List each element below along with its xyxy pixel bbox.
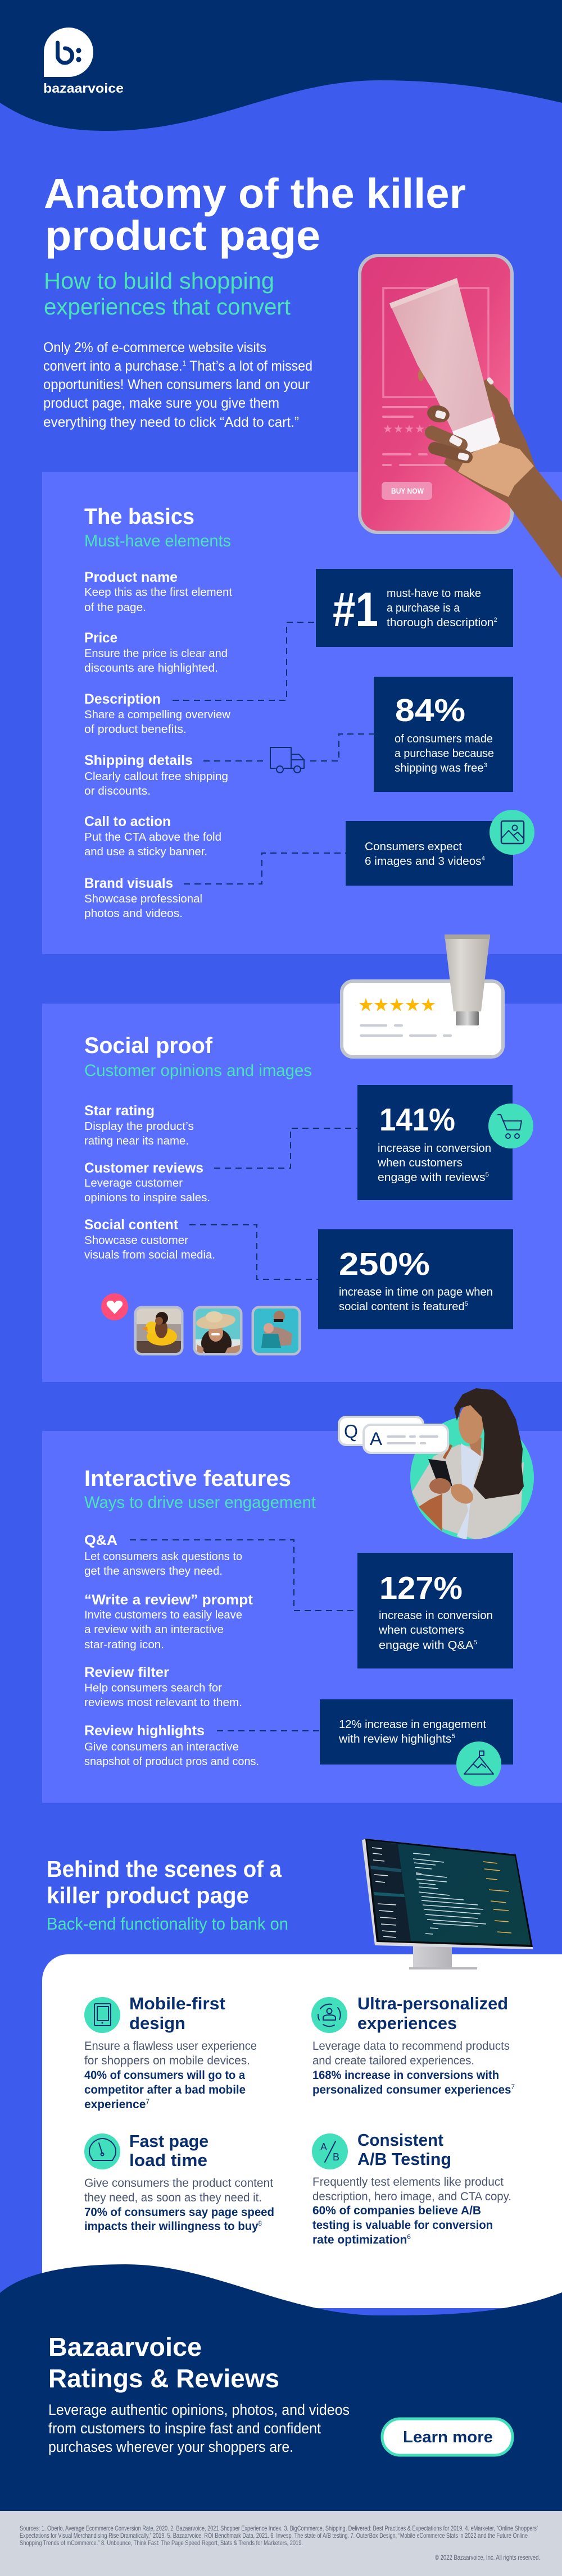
- feature: ultra-personalized experiences: and create tailored experiences.: [312, 2054, 474, 2067]
- header wave with logo: [0, 0, 562, 131]
- item: call to action: [84, 814, 221, 858]
- call to action text: from customers to inspire fast and confident: [48, 2420, 321, 2437]
- stat box: 127 percent: 127%: [379, 1570, 463, 1606]
- stat box: 84 percent: shipping was free: [395, 762, 482, 774]
- five gold stars: [359, 998, 435, 1011]
- illustration: phone with product page: [360, 256, 562, 578]
- intro text: Only 2% of e-commerce website visits: [43, 340, 266, 355]
- feature: mobile-first design: Ensure a flawless user experience: [84, 2040, 257, 2053]
- feature: mobile-first design: competitor after a bad mobile: [84, 2083, 246, 2096]
- feature: consistent A/B testing: description, hero image, and CTA copy.: [312, 2190, 511, 2203]
- connector: brand visuals to stat: [184, 853, 346, 884]
- stat box: 250 percent: 5: [465, 1301, 468, 1307]
- monitor frame: [362, 1839, 533, 1949]
- feature: mobile-first design: 40% of consumers will go to a: [84, 2069, 245, 2082]
- illustration: review card with tube: [342, 934, 503, 1057]
- title: product page: [45, 212, 320, 259]
- item: q and a: get the answers they need.: [84, 1565, 223, 1577]
- feature: consistent A/B testing: A/B Testing: [357, 2149, 451, 2169]
- item: social content: visuals from social media.: [84, 1249, 215, 1261]
- subheading: customer opinions: Customer opinions and images: [84, 1061, 312, 1080]
- stat box: 250 percent: increase in time on page when: [339, 1286, 493, 1298]
- item: write a review prompt: [84, 1592, 253, 1651]
- item: call to action: and use a sticky banner.: [84, 846, 207, 858]
- icon: A/B: [312, 2133, 348, 2169]
- stat box: 141 percent: when customers: [377, 1157, 463, 1169]
- intro text: 1: [183, 359, 186, 367]
- stat box: 141 percent: [357, 1085, 513, 1200]
- title: Anatomy of the killer: [44, 170, 466, 217]
- item: customer reviews: [84, 1160, 210, 1204]
- stat box: 250 percent: [318, 1229, 513, 1329]
- feature: ultra-personalized experiences: personalized consumer experiences: [312, 2083, 516, 2096]
- illustration: desktop monitor with code: [362, 1839, 533, 1969]
- feature: fast page load time: they need, as soon as they need it.: [84, 2191, 262, 2204]
- call to action text: [48, 2401, 350, 2455]
- item: star rating: Star rating: [84, 1103, 155, 1119]
- stat box: 127 percent: [357, 1553, 513, 1668]
- footer wave: call to action: [0, 2264, 562, 2511]
- item: description: Share a compelling overview: [84, 709, 231, 721]
- intro text: [43, 340, 312, 430]
- item: price: Price: [84, 630, 117, 646]
- feature: ultra-personalized experiences: Leverage data to recommend products: [312, 2040, 510, 2053]
- stat box: number one must-have: 2: [494, 617, 497, 623]
- subheading: ways to drive engagement: Ways to drive user engagement: [84, 1493, 316, 1512]
- icon: speedometer: [84, 2133, 120, 2169]
- stat box: 141 percent: engage with reviews: [378, 1171, 479, 1184]
- section heading: behind the scenes: killer product page: [47, 1882, 249, 1908]
- white tube: [445, 934, 490, 1025]
- feature: fast page load time: 70% of consumers say page speed: [84, 2206, 274, 2219]
- icon: person with cycle arrows: [311, 1997, 347, 2033]
- connector: shipping to truck: [203, 760, 265, 762]
- subheading: must-have elements: Must-have elements: [84, 532, 231, 550]
- stat box: images and videos: Consumers expect: [365, 841, 462, 853]
- stat box: 141 percent: 141%: [379, 1102, 455, 1138]
- item: q and a: [84, 1533, 242, 1577]
- connector: q and a to stat: [130, 1540, 357, 1611]
- feature: mobile-first design: experience: [84, 2098, 146, 2111]
- connector: social content to stat: [189, 1225, 318, 1279]
- feature: mobile-first design: design: [129, 2013, 185, 2033]
- heading: social proof: Social proof: [84, 1033, 213, 1058]
- item: description: Description: [84, 691, 161, 707]
- stat box: images and videos: [346, 821, 513, 886]
- item: brand visuals: [84, 876, 202, 920]
- button: learn more: [382, 2419, 513, 2455]
- panel: the basics: [42, 472, 562, 954]
- icon: tablet: [84, 1997, 120, 2033]
- feature: ultra-personalized experiences: 7: [511, 2083, 515, 2091]
- item: description: [84, 691, 231, 736]
- stat box: 250 percent: 250%: [339, 1246, 430, 1282]
- item: review filter: [84, 1665, 242, 1709]
- bubble: answer: A: [370, 1429, 383, 1449]
- item: brand visuals: photos and videos.: [84, 908, 183, 920]
- photo: woman in sun hat: [194, 1307, 241, 1358]
- heading: bazaarvoice ratings and reviews: Ratings & Reviews: [48, 2364, 279, 2393]
- icon: truck: [270, 747, 304, 773]
- feature: mobile-first design: 7: [146, 2098, 149, 2105]
- hand: fingers: [425, 377, 495, 461]
- section heading: behind the scenes: [47, 1856, 288, 1934]
- item: review highlights: Review highlights: [84, 1723, 205, 1739]
- feature: fast page load time: 8: [259, 2219, 262, 2227]
- item: social content: Social content: [84, 1217, 179, 1233]
- stat box: 12 percent: with review highlights: [339, 1733, 445, 1745]
- phone rating stars: [383, 425, 434, 432]
- intro text: product page, make sure you give them: [43, 395, 279, 411]
- item: social content: Showcase customer: [84, 1234, 188, 1247]
- icon: heart: [101, 1293, 128, 1320]
- connector: reviews to stat: [214, 1128, 357, 1168]
- feature: consistent A/B testing: Frequently test elements like product: [312, 2176, 504, 2189]
- connector: description to stat: [173, 622, 316, 700]
- item: shipping details: or discounts.: [84, 785, 151, 797]
- item: product name: Product name: [84, 569, 178, 585]
- section heading: behind the scenes: Back-end functionality to bank on: [47, 1914, 288, 1934]
- monitor screen: [367, 1840, 531, 1945]
- title: [44, 170, 466, 259]
- icon: cart: [488, 1104, 533, 1148]
- footer: sources: [0, 2511, 562, 2576]
- photo: family in pool: [253, 1307, 300, 1354]
- feature: consistent A/B testing: 60% of companies believe A/B: [312, 2204, 481, 2217]
- stat box: 84 percent: a purchase because: [395, 747, 494, 760]
- call to action text: Leverage authentic opinions, photos, and videos: [48, 2401, 350, 2418]
- monitor stand: [409, 1946, 477, 1969]
- item: brand visuals: Showcase professional: [84, 893, 202, 905]
- item: write a review prompt: star-rating icon.: [84, 1639, 164, 1651]
- button: learn more: Learn more: [403, 2428, 493, 2446]
- item: write a review prompt: a review with an interactive: [84, 1624, 224, 1636]
- item: review highlights: [84, 1723, 259, 1768]
- panel: interactive features: [42, 1431, 562, 1803]
- icon: image: [490, 810, 534, 855]
- feature: ultra-personalized experiences: Ultra-personalized: [357, 1994, 508, 2013]
- subtitle: [44, 268, 291, 320]
- item: shipping details: Shipping details: [84, 753, 193, 768]
- stat box: number one must-have: must-have to make: [387, 587, 481, 600]
- intro text: everything they need to click “Add to cart.”: [43, 414, 299, 430]
- stat box: images and videos: 6 images and 3 videos: [365, 855, 477, 868]
- product tube: [389, 278, 500, 453]
- stat box: 84 percent: 3: [484, 762, 487, 769]
- feature: fast page load time: impacts their willingness to buy: [84, 2220, 264, 2233]
- intro text: convert into a purchase.: [43, 358, 193, 374]
- item: write a review prompt: Invite customers to easily leave: [84, 1609, 242, 1621]
- stat box: 127 percent: when customers: [378, 1624, 464, 1636]
- item: review highlights: snapshot of product pros and cons.: [84, 1756, 259, 1768]
- item: q and a: Let consumers ask questions to: [84, 1551, 242, 1563]
- heading: bazaarvoice ratings and reviews: [48, 2332, 279, 2393]
- item: star rating: rating near its name.: [84, 1135, 189, 1147]
- icon: A/B: A: [320, 2141, 327, 2153]
- item: customer reviews: Customer reviews: [84, 1160, 203, 1176]
- feature: ultra-personalized experiences: experiences: [357, 2013, 457, 2033]
- feature: consistent A/B testing: rate optimization: [312, 2233, 407, 2246]
- call to action text: purchases wherever your shoppers are.: [48, 2438, 293, 2455]
- item: q and a: Q&A: [84, 1533, 117, 1548]
- item: price: discounts are highlighted.: [84, 662, 218, 674]
- item: shipping details: [84, 753, 228, 797]
- source citations: Shopping Trends of mCommerce.” 8. Unbounce, Think Fast: The Page Speed Report, Stats & Trends for Marketers, 2019.: [20, 2539, 303, 2547]
- stat box: 250 percent: social content is featured: [339, 1301, 463, 1313]
- feature: ultra-personalized experiences: 168% increase in conversions with: [312, 2069, 499, 2082]
- phone text placeholders: [382, 406, 450, 466]
- heading: bazaarvoice ratings and reviews: Bazaarvoice: [48, 2332, 202, 2361]
- item: product name: [84, 569, 232, 614]
- feature: fast page load time: Fast page: [129, 2131, 209, 2151]
- feature: mobile-first design: for shoppers on mobile devices.: [84, 2054, 250, 2067]
- intro text: That’s a lot of missed: [186, 358, 312, 374]
- stat box: 12 percent: 5: [452, 1733, 455, 1740]
- stat box: 84 percent: 84%: [395, 692, 465, 728]
- subtitle: experiences that convert: [44, 294, 291, 320]
- item: review highlights: Give consumers an interactive: [84, 1741, 239, 1753]
- stat box: number one must-have: thorough description: [387, 617, 488, 629]
- item: review filter: Review filter: [84, 1665, 169, 1680]
- buy now button: BUY NOW: [391, 486, 424, 495]
- item: star rating: Display the product’s: [84, 1120, 194, 1133]
- icon: mountain flag: [456, 1741, 501, 1786]
- heading: interactive features: Interactive features: [84, 1466, 291, 1491]
- feature: fast page load time: [84, 2131, 274, 2233]
- hand: palm and arm: [418, 369, 562, 578]
- heading: the basics: The basics: [84, 504, 194, 529]
- section heading: behind the scenes: Behind the scenes of a: [47, 1856, 282, 1882]
- item: price: [84, 630, 228, 674]
- photo: woman using phone: [412, 1388, 524, 1542]
- item: price: Ensure the price is clear and: [84, 648, 228, 660]
- item: star rating: [84, 1103, 194, 1147]
- feature: fast page load time: Give consumers the product content: [84, 2177, 273, 2190]
- stat box: number one must-have: [316, 569, 513, 647]
- bubble: answer: [364, 1425, 448, 1453]
- stat box: number one must-have: #1: [333, 583, 378, 637]
- stat box: 141 percent: 5: [486, 1171, 489, 1178]
- item: review filter: Help consumers search for: [84, 1682, 222, 1694]
- stat box: 12 percent: [320, 1699, 513, 1765]
- photo: child with duck float: [135, 1307, 182, 1354]
- item: call to action: Put the CTA above the fold: [84, 831, 221, 844]
- item: description: of product benefits.: [84, 723, 187, 736]
- feature: consistent A/B testing: Consistent: [357, 2130, 443, 2150]
- stat box: 127 percent: increase in conversion: [379, 1610, 493, 1622]
- item: review filter: reviews most relevant to them.: [84, 1697, 242, 1709]
- icon: bazaarvoice logo: [44, 28, 93, 77]
- item: customer reviews: opinions to inspire sales.: [84, 1192, 210, 1204]
- feature: mobile-first design: [84, 1994, 257, 2111]
- feature: consistent A/B testing: 6: [407, 2233, 411, 2241]
- panel: social proof: [42, 1004, 562, 1382]
- item: write a review prompt: “Write a review” prompt: [84, 1592, 253, 1608]
- bubble: question: Q: [344, 1421, 358, 1442]
- item: brand visuals: Brand visuals: [84, 876, 173, 891]
- illustration: woman with phone and Q and A bubbles: [339, 1388, 534, 1542]
- stat box: 141 percent: increase in conversion: [378, 1142, 491, 1155]
- feature: consistent A/B testing: [312, 2130, 511, 2246]
- feature: mobile-first design: Mobile-first: [129, 1994, 225, 2013]
- item: customer reviews: Leverage customer: [84, 1177, 183, 1189]
- item: product name: of the page.: [84, 601, 146, 614]
- stat box: 127 percent: engage with Q&A: [379, 1639, 466, 1652]
- item: product name: Keep this as the first element: [84, 586, 232, 599]
- subtitle: How to build shopping: [44, 268, 274, 294]
- stat box: 84 percent: [374, 677, 513, 792]
- buy now button: [382, 482, 432, 500]
- stat box: 127 percent: 5: [473, 1639, 477, 1646]
- phone image placeholder: [383, 288, 488, 397]
- stat box: 12 percent: 12% increase in engagement: [339, 1718, 486, 1731]
- stat box: images and videos: 4: [482, 855, 485, 862]
- connector: truck to stat: [310, 734, 374, 761]
- intro text: opportunities! When consumers land on your: [43, 377, 310, 393]
- logo wordmark: bazaarvoice: [43, 81, 124, 95]
- connector: review highlights to stat: [217, 1730, 320, 1731]
- icon: A/B: B: [333, 2151, 339, 2163]
- item: call to action: Call to action: [84, 814, 171, 829]
- source citations: [20, 2524, 538, 2547]
- panel: back-end functionality: [42, 1954, 562, 2308]
- item: shipping details: Clearly callout free shipping: [84, 770, 228, 783]
- stat box: 84 percent: of consumers made: [395, 733, 493, 745]
- bubble: question: [339, 1417, 423, 1445]
- stat box: number one must-have: a purchase is a: [387, 602, 460, 614]
- feature: consistent A/B testing: testing is valuable for conversion: [312, 2219, 493, 2232]
- review text placeholders: [360, 1024, 452, 1037]
- feature: fast page load time: load time: [129, 2150, 207, 2170]
- feature: ultra-personalized experiences: [311, 1994, 515, 2096]
- item: social content: [84, 1217, 215, 1261]
